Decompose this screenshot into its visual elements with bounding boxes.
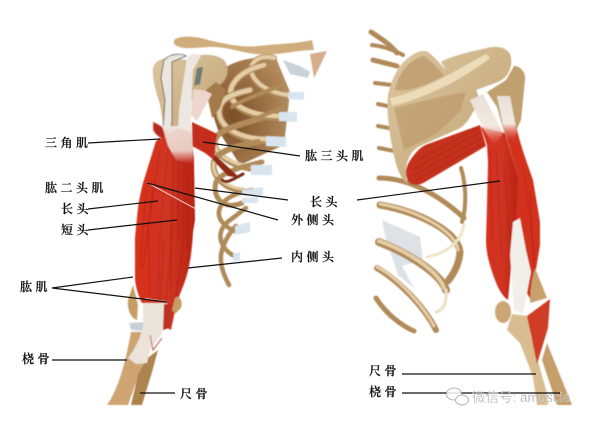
left radius	[107, 332, 144, 405]
watermark: 微信号: amuscle	[472, 390, 570, 405]
labels: 肱肌	[20, 279, 51, 294]
infraspinous shadow	[394, 92, 466, 150]
elbow cartilage	[129, 322, 144, 331]
right upper ribs	[371, 32, 403, 151]
deltoid stump	[153, 122, 170, 140]
triceps central tendon	[510, 218, 531, 314]
brachialis tip	[163, 304, 172, 330]
scapula behind ribs	[208, 57, 290, 165]
biceps tendon fade	[162, 126, 193, 164]
humeral condyles	[128, 285, 182, 320]
teres muscle	[406, 125, 486, 185]
ulna posterior	[507, 314, 548, 405]
triceps deep part	[213, 155, 240, 178]
labels: 长头	[310, 194, 341, 209]
glenoid shadow	[194, 67, 203, 86]
right figure: posterior arm and ribcage	[371, 32, 572, 405]
triceps lateral head	[503, 125, 540, 300]
scapula	[387, 47, 511, 184]
radius posterior	[542, 343, 572, 405]
posterior humerus	[487, 66, 525, 135]
labels: 肱二头肌	[45, 180, 107, 195]
teres fibres	[412, 128, 484, 180]
upper tendons	[470, 94, 503, 146]
labels: 短头	[61, 222, 92, 237]
distal humerus	[530, 268, 547, 303]
left ribs	[214, 57, 289, 285]
lateral head tendon	[497, 96, 517, 142]
anconeus	[527, 299, 550, 364]
right lower ribs	[376, 168, 465, 331]
label lines	[52, 139, 560, 393]
triceps long head	[192, 122, 217, 160]
labels: 外侧头	[291, 212, 338, 227]
bone shadow under head	[206, 82, 226, 118]
humeral head	[153, 55, 228, 130]
distal biceps tendon	[128, 303, 167, 364]
labels: 肱三头肌	[305, 148, 367, 163]
muscle fibres	[140, 150, 188, 310]
supraspinous fossa	[395, 56, 444, 90]
clavicle	[174, 37, 314, 54]
scapular spine	[390, 54, 490, 106]
labels: 桡骨	[22, 351, 53, 366]
left figure: anterior arm and ribcage	[107, 37, 327, 405]
fan tendon	[191, 89, 212, 121]
labels: 三角肌	[45, 136, 92, 150]
tendon of long head with black edge	[161, 54, 186, 130]
triceps fibres	[490, 150, 535, 270]
costal cartilage	[233, 60, 310, 261]
sternal cartilage	[382, 220, 423, 288]
labels: 长头	[61, 201, 92, 216]
labels: 内侧头	[291, 249, 338, 264]
icon: wechat	[446, 388, 468, 405]
olecranon	[495, 301, 511, 323]
labels: 尺骨	[369, 364, 400, 378]
left ulna	[131, 350, 158, 405]
biceps and brachialis	[135, 128, 195, 330]
triceps long head	[481, 127, 519, 300]
thin red tendon edge	[150, 335, 162, 350]
sternum end	[310, 51, 327, 78]
labels: 尺骨	[180, 387, 211, 401]
labels	[20, 136, 400, 401]
labels: 桡骨	[369, 384, 400, 399]
short tendon of biceps	[176, 54, 201, 162]
